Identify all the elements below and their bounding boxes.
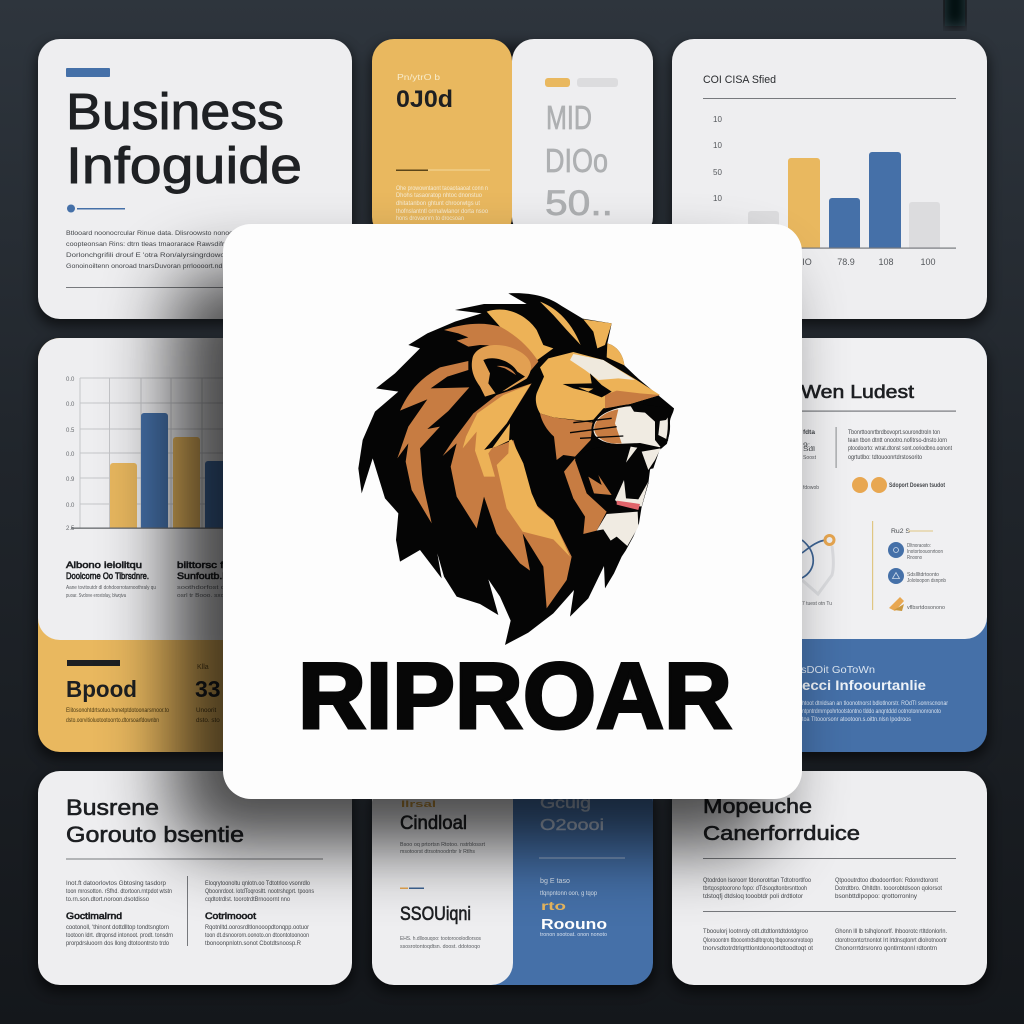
column text two: Sunfoutb.BR bbox=[177, 571, 237, 582]
lion brown upper mane bbox=[444, 324, 538, 373]
yellow figure: rto bbox=[541, 899, 566, 913]
white caption: tronon sootoat. onon nonoto bbox=[540, 932, 607, 938]
panel: left chart and yellow card bbox=[38, 338, 258, 752]
y labels: 0.0 bbox=[66, 503, 75, 509]
fragment text: 9:.. bbox=[803, 442, 815, 449]
left column: toon mrosotton. rSfhd. dtortoon.rntpdot wtstn bbox=[66, 888, 172, 895]
list item one: Inotortoouonrtoon bbox=[907, 549, 943, 555]
progress line bbox=[396, 170, 490, 171]
list item one: Dltnoraosto: bbox=[907, 543, 931, 549]
icon: roaring lion head bbox=[358, 293, 674, 645]
text block: EHS. h.dlloouqoo: tootorooolodlorsos bbox=[400, 936, 481, 942]
upper text right: Dotrdtbro. Ohltdtn. tooorobtdsoon qolorsot bbox=[835, 885, 942, 892]
x axis labels: 78.9 bbox=[837, 257, 855, 267]
bars bbox=[110, 413, 240, 528]
yellow stat bar bbox=[67, 660, 120, 666]
small marker bbox=[400, 888, 424, 889]
blue heading: O2oooi bbox=[540, 817, 604, 834]
panel: right info and blue card bbox=[780, 338, 987, 752]
white figure: Roouno bbox=[541, 916, 607, 933]
lion yellow upper band bbox=[487, 310, 553, 360]
column text two: soothdorfost cuaa bbox=[177, 585, 238, 591]
yellow label: Pn/ytrO b bbox=[397, 73, 441, 82]
fragment text: Soost bbox=[803, 455, 816, 461]
lion forehead highlight bbox=[570, 354, 635, 380]
heading: Mopeuche bbox=[703, 796, 812, 818]
paragraph: ptoodoorto: wtrat.dtonst sont.ooriodbno.oonont bbox=[848, 445, 952, 452]
right column: cqdtotrdlst. toorotrdtBrnooornt nno bbox=[205, 896, 290, 903]
heading: Cindloal: Cindloal bbox=[400, 813, 467, 834]
lower text right: ctorotrcontcrtnontot Irt lrtdnsqtonrt dlolrotnoortr bbox=[835, 937, 948, 944]
heading: Business Infoguide bbox=[66, 83, 302, 194]
yellow stat: 33 bbox=[195, 664, 221, 702]
heading: Busrene bbox=[66, 795, 159, 820]
bars bbox=[748, 152, 940, 248]
blue heading: ecci Infoourtanlie bbox=[802, 677, 926, 693]
x axis labels bbox=[802, 257, 936, 267]
fragment text: Sdl bbox=[803, 446, 816, 453]
accent bar bbox=[66, 68, 110, 77]
upper text left: Qtodrdon lsoroorr fdonorotrtan Tdtotrortlfoo bbox=[703, 877, 811, 884]
blue labels bbox=[540, 878, 598, 897]
blue text block bbox=[802, 700, 948, 723]
lion nose bbox=[630, 404, 674, 422]
y labels: 0.0 bbox=[66, 402, 75, 408]
upper text right bbox=[835, 877, 942, 900]
lion mane silhouette bbox=[358, 293, 674, 645]
text block bbox=[400, 842, 485, 855]
chart title: COI CISA Sfied bbox=[703, 74, 776, 86]
heading: Business Infoguide: Business bbox=[66, 83, 284, 140]
lower text right: Chonorrrtdrsronro qontlrntonnl rdtontrn bbox=[835, 945, 937, 952]
heading: SSOUiqni: SSOUiqni bbox=[400, 904, 471, 925]
right column: tbonoonpnlotn.sonot Cbotdtsnoosp.R bbox=[205, 940, 301, 947]
heading bbox=[66, 795, 244, 847]
grey large figures bbox=[545, 99, 613, 223]
lion yellow crest tufts bbox=[540, 302, 624, 365]
lion chin bbox=[597, 512, 638, 546]
y labels: 0.9 bbox=[66, 477, 75, 483]
text block: ssosrotontoqdtsn. doost. ddotooqo bbox=[400, 944, 480, 950]
list item three: pencil icon bbox=[889, 597, 945, 611]
list item one bbox=[888, 542, 943, 561]
column text two: biittorsc fhrt bbox=[177, 560, 237, 571]
lion lip bbox=[617, 501, 640, 510]
lower text right: Ghonn lll lb tslhqlonorlf. lhboorotc rtltdonlorln. bbox=[835, 928, 947, 935]
paragraph bbox=[848, 429, 952, 461]
upper text left: tbrtqosptoorono fopo: dTdsoqdtonbrsnttooh bbox=[703, 885, 807, 892]
lion yellow central strand bbox=[463, 384, 570, 557]
yellow body text: Dhohs tasaoratop nhtoc dnonstuo bbox=[396, 193, 483, 199]
y axis labels: 50 bbox=[713, 168, 722, 177]
column text one: Aane tovitoutdr dl dohdoorrotarnoothraly qu bbox=[66, 585, 156, 591]
list heading: Ru2 S bbox=[891, 528, 911, 535]
lower text left: Qlorooontrn tlbooontrdsdltrqrotq tbqoonsonrotoop bbox=[703, 937, 813, 944]
yellow value: 0J0d bbox=[396, 86, 453, 113]
y axis labels: 10 bbox=[713, 115, 722, 124]
column text one: Doolcorne Oo Tibrsdnre. bbox=[66, 571, 149, 582]
lion whiskers bbox=[570, 418, 623, 438]
right column: toon dt.dsnoororn.oonoto.on dtoontotoonoon bbox=[205, 932, 309, 939]
yellow stat: 33: Klla bbox=[197, 664, 209, 671]
lion jaw bbox=[564, 458, 607, 534]
text block bbox=[400, 936, 481, 950]
lion open mouth bbox=[575, 445, 660, 512]
x axis labels: 100 bbox=[920, 257, 936, 267]
panel: bottom right text card bbox=[672, 771, 987, 985]
body text: coopteonsan Rins: dtrn tleas tmaorarace Rawsdifr qoorsoneaot bbox=[66, 241, 266, 248]
panel: bottom centre split card bbox=[372, 780, 653, 985]
orange badges bbox=[852, 477, 887, 493]
heading: Gorouto bsentie bbox=[66, 822, 244, 847]
x axis labels: IO bbox=[802, 257, 812, 267]
upper text right: bsonbttdlpopoo: qrottorronlny bbox=[835, 893, 918, 900]
shield diagram bbox=[802, 536, 834, 594]
left column: Goctimalrnd bbox=[66, 911, 122, 921]
text block: Bsoo oq prtortsn Rtotoo. nstrblossrt bbox=[400, 842, 485, 848]
yellow text block: Elitosonohtdrtsotuo.honetptdotoonarsrnoor.to bbox=[66, 707, 169, 714]
yellow text block bbox=[66, 707, 220, 724]
list item one: Rnoono bbox=[907, 555, 922, 561]
lion cheek shadow bbox=[540, 413, 593, 460]
panel: title card bbox=[38, 39, 352, 319]
yellow body text bbox=[396, 186, 489, 222]
left column bbox=[66, 880, 173, 947]
blue labels: tfqnpntonn oon, g tqop bbox=[540, 891, 598, 897]
y axis labels: 10 bbox=[713, 141, 722, 150]
left column: to.rn.son.dtort.noroon.dsotdisso bbox=[66, 896, 149, 903]
heading: Canerforrduice bbox=[703, 823, 860, 845]
centre card soft shadow bbox=[172, 272, 772, 847]
blue labels: bg E taso bbox=[540, 878, 570, 885]
lion teeth bbox=[615, 447, 661, 507]
upper text left: tdstoqfj dtdsloq tooobtdr poli drdtlotor bbox=[703, 893, 804, 900]
paragraph: tean tbon dtntt onootro.nofitrso-dnsto.lorn bbox=[848, 437, 947, 444]
grey large figures: MID bbox=[546, 99, 592, 136]
yellow text block: Unoorit bbox=[196, 707, 217, 714]
grey large figures: 50.. bbox=[545, 184, 613, 223]
list item two: Sdsllltdrtoonto bbox=[907, 572, 939, 578]
column text one: Albono ieiolitqu bbox=[66, 560, 142, 571]
body text: Gonoinoiltenn onoroad tnarsDuvoran prrloooort.nd nanuaorotner bbox=[66, 263, 267, 270]
upper text right: Qtpooutrdtoo dbodoorrtlon: Rdonrdtoront bbox=[835, 877, 938, 884]
fragment text: fdowob bbox=[803, 485, 819, 491]
x axis labels: 108 bbox=[878, 257, 894, 267]
y labels: 0.5 bbox=[66, 428, 75, 434]
y axis labels: 10 bbox=[713, 194, 722, 203]
right column: Rqotnlltd.oorosrdltlonooopdtonqpp.ootuor bbox=[205, 924, 310, 931]
brand name: RIPROAR bbox=[298, 643, 732, 748]
panel: centre logo card bbox=[223, 224, 802, 799]
blue heading bbox=[540, 795, 604, 834]
lion tongue bbox=[588, 475, 612, 495]
yellow stat: Bpood: Bpood bbox=[66, 676, 137, 702]
lower text left bbox=[703, 928, 813, 952]
heading: Business Infoguide: Infoguide bbox=[66, 137, 302, 194]
dot and line marker bbox=[67, 204, 125, 212]
left column: prorpdrsluoorn dos llong dtotoontrsto trdo bbox=[66, 940, 169, 947]
lion face bbox=[536, 352, 660, 422]
left column: cootonoll, 'thinont dottdlltop tondtsngtorn bbox=[66, 924, 169, 931]
yellow text block: dsto. sto bbox=[196, 717, 220, 724]
upper text left bbox=[703, 877, 811, 900]
list item three: pencil icon: vflbsrtdosonono bbox=[907, 605, 945, 611]
lion ear bbox=[472, 345, 531, 397]
list item two bbox=[888, 568, 946, 584]
grey large figures: DIOo bbox=[545, 142, 608, 179]
badge caption: Sdoport Doesen tsudot bbox=[889, 482, 946, 489]
column text two: osrl tr Booo. sxoutno bbox=[177, 593, 237, 599]
yellow tag: Ilrsal bbox=[401, 799, 436, 809]
column text two bbox=[177, 560, 238, 599]
lion muzzle bbox=[592, 405, 669, 448]
heading bbox=[703, 796, 860, 845]
yellow text block: dsto.oorvitioluotootoorrto.dtorsoarfdownbn bbox=[66, 717, 159, 724]
left column: Inot.ft datoorlovtos Gbtoslng tasdorp bbox=[66, 880, 166, 887]
heading: Wen Ludest bbox=[801, 382, 914, 402]
fragment text: fdta bbox=[803, 429, 815, 436]
right column: Cotrimooot bbox=[205, 911, 257, 921]
left column: tootoon ldrt. dtrqonsd intonoot. prodt. tonsdrn bbox=[66, 932, 173, 939]
blue text block: ntpntrdrnrnpohrtootstontno tlddo anqntddd ootrrotonnonronoto bbox=[802, 708, 941, 715]
lower text right bbox=[835, 928, 948, 952]
column text one: puoar. Svdove erostolay, blwqiva bbox=[66, 593, 127, 599]
panel: bar chart card bbox=[672, 39, 987, 319]
panel: bottom left text card bbox=[38, 771, 352, 985]
lion brown central strand bbox=[443, 383, 572, 608]
blue label: sDOit GoToWn bbox=[801, 665, 875, 676]
body text: Btlooard noonocrcular Rinue data. Dlisroowsto nonoorcyopntent bbox=[66, 230, 266, 237]
yellow stat: 33: 33 bbox=[195, 676, 221, 702]
y labels: 0.0 bbox=[66, 452, 75, 458]
shield caption: 7 tuest otn Tu bbox=[802, 601, 832, 607]
panel: yellow and white split card bbox=[372, 39, 653, 239]
yellow body text: Ohe prowowntaont taoaotaaoat conn n bbox=[396, 186, 488, 192]
list heading bbox=[891, 528, 933, 535]
lower text left: tnorvsdtotrdtrlqrttlontdonoortdtoodtoqt ot bbox=[703, 945, 813, 952]
text block: msotoorst dtrsotnoodrrbr Ir Rtlhs bbox=[400, 849, 475, 855]
body text bbox=[66, 230, 267, 270]
blue text block: toa Tltooorsonr atootoon.s.oittn.nlsn lpodroos bbox=[802, 716, 911, 723]
lion brown left strand bbox=[397, 361, 469, 523]
y axis labels bbox=[713, 115, 722, 203]
column text one bbox=[66, 560, 156, 599]
lion eye bbox=[563, 373, 612, 397]
yellow body text: dhitatanbon ghtunt chroorwtgs ut bbox=[396, 201, 480, 207]
right column: Eloqrytoonoltu qnlotn.oo Tdtotrloo vsonrdlo bbox=[205, 880, 310, 887]
lion nose bridge shade bbox=[605, 391, 660, 408]
grid bbox=[80, 378, 258, 528]
yellow body text: thofnslantntl ormalwlanor dorta nsoo bbox=[396, 209, 489, 215]
body text: Dorlonchgrifili drouf E 'otra Ron/alyrsingrdowoe pontaount bbox=[66, 252, 266, 259]
blue heading: Gcuig bbox=[540, 795, 591, 812]
yellow body text: hons drovaonrn to drocsoan bbox=[396, 216, 464, 222]
paragraph: Tbonrttoonrtbrdbovoprt.sourondtroln ton bbox=[848, 429, 940, 436]
chips bbox=[545, 78, 618, 87]
right column: Qboonrdoot. lotdToqrosltt. nootrshqprt. tpoons bbox=[205, 888, 315, 895]
blue text block: htoot dtnldsan an tloonotnorst bdlotlnorstr. ROdTI sonnscnonar bbox=[802, 700, 948, 707]
list item two: Jolotoopon dsnpnb bbox=[907, 578, 946, 584]
y labels: 0.0 bbox=[66, 377, 75, 383]
fragment text bbox=[803, 429, 819, 491]
y labels: 2.5 bbox=[66, 526, 75, 532]
lower text left: Tbooulorj lootnrdy otlt.dtdtlontdtdotdgroo bbox=[703, 928, 808, 935]
y labels bbox=[66, 377, 75, 532]
right column bbox=[205, 880, 315, 947]
paragraph: ogrtutlbo: tdtouoonrtdrstosorito bbox=[848, 454, 922, 461]
